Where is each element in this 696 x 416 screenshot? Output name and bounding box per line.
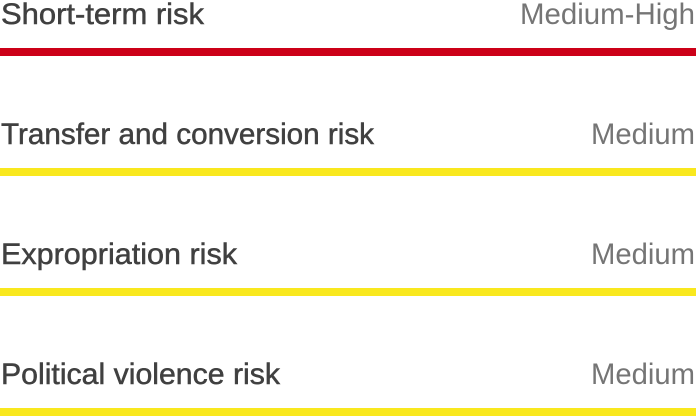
row: political violence risk <box>0 358 696 416</box>
rating: medium: Medium <box>591 118 695 151</box>
row: short-term risk <box>0 0 696 56</box>
label: transfer and conversion risk: Transfer and conversion risk <box>1 118 375 151</box>
rating: medium: Medium <box>591 238 695 271</box>
rating: medium: Medium <box>591 358 695 391</box>
red rating bar <box>0 48 696 56</box>
yellow rating bar <box>0 168 696 176</box>
yellow rating bar <box>0 288 696 296</box>
yellow rating bar <box>0 408 696 416</box>
row: expropriation risk <box>0 238 696 296</box>
row: transfer and conversion risk <box>0 118 696 176</box>
label: political violence risk: Political violence risk <box>1 358 281 391</box>
label: expropriation risk: Expropriation risk <box>1 238 238 271</box>
